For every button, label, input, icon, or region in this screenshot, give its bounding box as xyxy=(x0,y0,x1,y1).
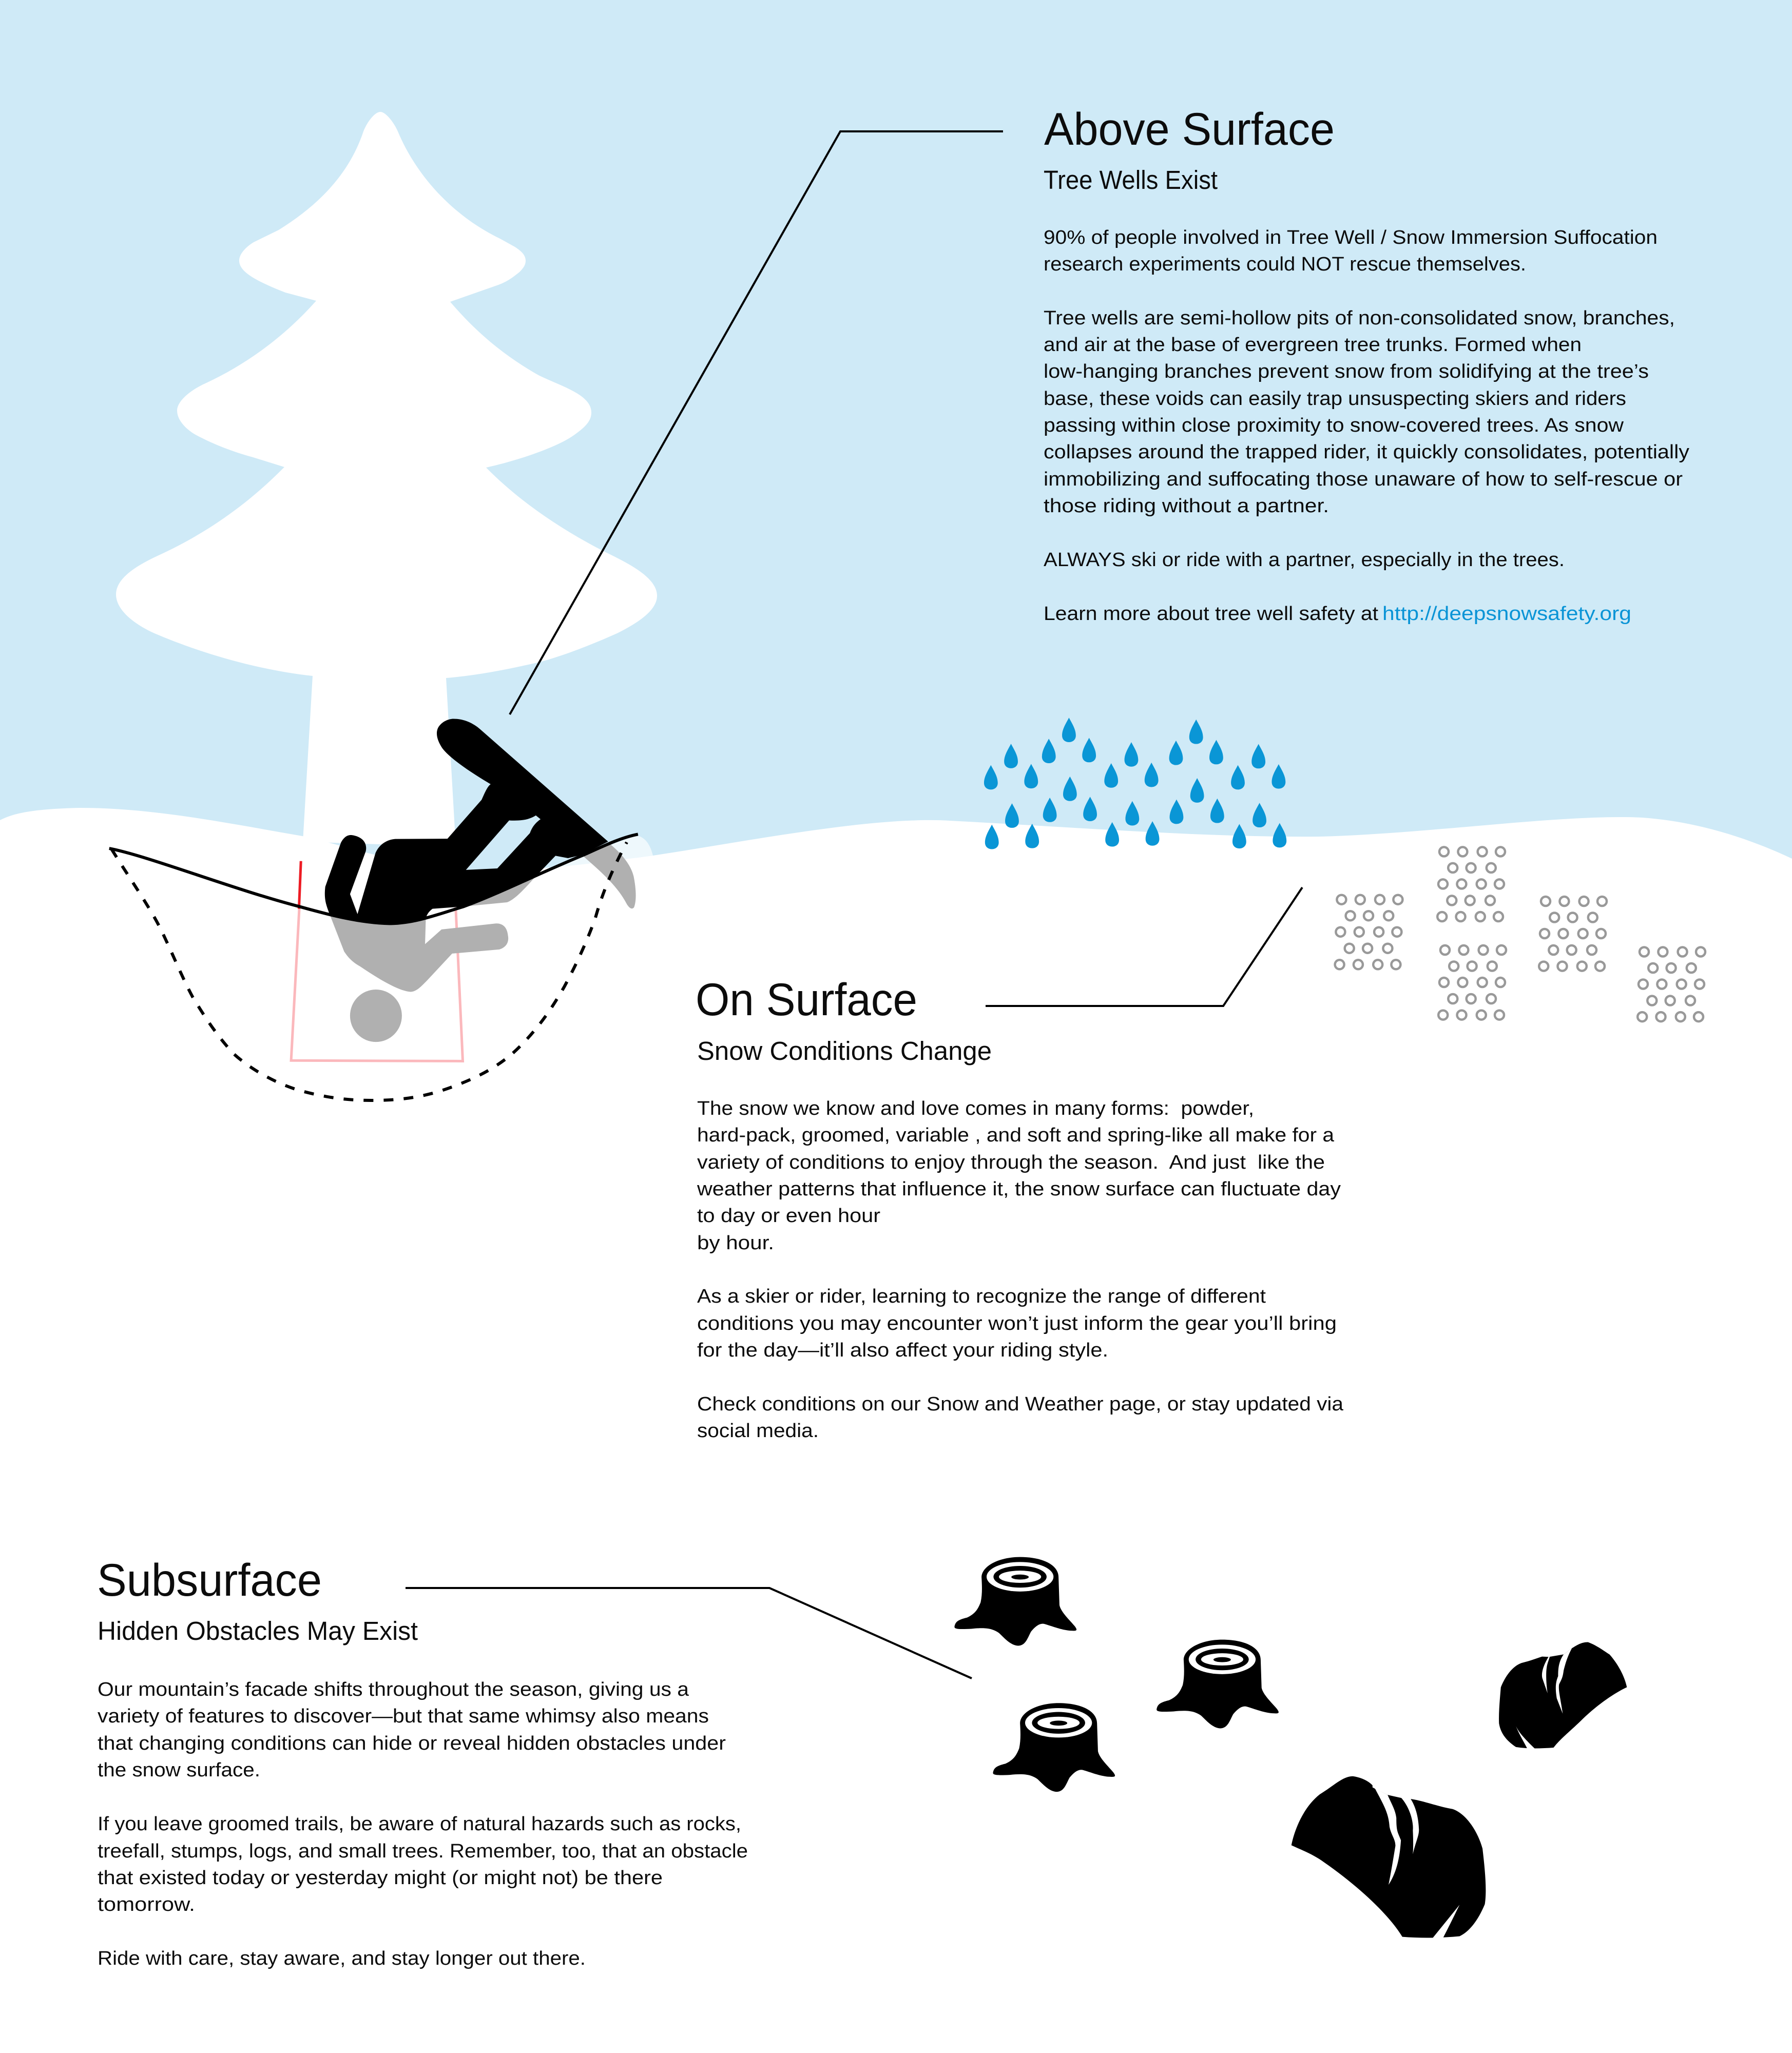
icon: water drops xyxy=(984,718,1286,849)
snow surface curve xyxy=(109,834,638,923)
body text: on surface: As a skier or rider, learning to recognize the range of different xyxy=(697,1286,1266,1307)
body text: on surface: The snow we know and love comes in many forms: powder, xyxy=(697,1098,1254,1119)
leader line: subsurface xyxy=(406,1588,972,1678)
body text: subsurface: If you leave groomed trails, be aware of natural hazards such as rocks, xyxy=(98,1813,741,1835)
person depth box xyxy=(291,861,463,1061)
body text: on surface: Check conditions on our Snow and Weather page, or stay updated via xyxy=(697,1393,1344,1415)
panel: subsurface text xyxy=(97,1554,748,1969)
buried rider figure xyxy=(109,719,638,1061)
body text: subsurface: treefall, stumps, logs, and small trees. Remember, too, that an obstacle xyxy=(98,1841,748,1862)
icon: snow clusters xyxy=(1335,847,1705,1021)
heading: subsurface: Subsurface xyxy=(97,1554,322,1605)
heading: on surface: On Surface xyxy=(696,974,917,1025)
body text: above surface: research experiments could NOT rescue themselves. xyxy=(1044,254,1526,275)
body text: on surface xyxy=(697,1098,1344,1442)
tree well snow haze xyxy=(536,835,653,874)
body text: above surface: http://deepsnowsafety.org xyxy=(1382,603,1631,625)
body text: subsurface: the snow surface. xyxy=(98,1759,260,1781)
icon: stump 3 xyxy=(993,1703,1115,1792)
body text: on surface: conditions you may encounter won’t just inform the gear you’ll bring xyxy=(697,1313,1337,1334)
body text: above surface: Tree wells are semi-hollow pits of non-consolidated snow, branches, xyxy=(1044,307,1675,329)
body text: above surface: collapses around the trapped rider, it quickly consolidates, potentially xyxy=(1044,441,1689,463)
icon: large rock xyxy=(1292,1776,1486,1939)
body text: above surface: Learn more about tree well safety at xyxy=(1044,603,1378,625)
subheading: snow conditions change: Snow Conditions Change xyxy=(697,1036,992,1066)
subheading: hidden obstacles may exist: Hidden Obstacles May Exist xyxy=(98,1616,418,1645)
body text: subsurface: Ride with care, stay aware, and stay longer out there. xyxy=(98,1948,586,1969)
body text: subsurface: Our mountain’s facade shifts throughout the season, giving us a xyxy=(98,1679,689,1700)
buried rider gray xyxy=(331,843,636,1042)
leader line: on surface xyxy=(986,887,1302,1006)
body text: on surface: for the day—it’ll also affect your riding style. xyxy=(697,1340,1108,1361)
rider and snowboard black xyxy=(325,719,608,924)
body text: above surface xyxy=(1044,227,1689,625)
body text: on surface: variety of conditions to enjoy through the season. And just like the xyxy=(697,1152,1325,1173)
body text: on surface: by hour. xyxy=(697,1232,774,1254)
heading: above surface: Above Surface xyxy=(1044,103,1335,154)
snow ground xyxy=(0,808,1792,2053)
icon: stump 2 xyxy=(1157,1640,1279,1729)
body text: above surface: base, these voids can easily trap unsuspecting skiers and riders xyxy=(1044,388,1626,410)
leader line: above surface xyxy=(510,131,1003,714)
body text: above surface: 90% of people involved in Tree Well / Snow Immersion Suffocation xyxy=(1044,227,1658,248)
body text: above surface: low-hanging branches prevent snow from solidifying at the tree’s xyxy=(1044,361,1649,382)
body text: subsurface: tomorrow. xyxy=(98,1894,195,1915)
body text: subsurface: variety of features to discover—but that same whimsy also means xyxy=(98,1706,709,1727)
panel: on surface text xyxy=(696,974,1344,1442)
tree xyxy=(116,112,657,847)
body text: on surface: hard-pack, groomed, variable , and soft and spring-like all make for a xyxy=(697,1125,1335,1146)
body text: subsurface xyxy=(98,1679,748,1969)
panel: above surface text xyxy=(1044,103,1689,625)
icon: small rock xyxy=(1499,1642,1627,1749)
body text: above surface: passing within close proximity to snow-covered trees. As snow xyxy=(1044,415,1624,436)
body text: above surface: ALWAYS ski or ride with a partner, especially in the trees. xyxy=(1044,549,1565,571)
body text: above surface: and air at the base of evergreen tree trunks. Formed when xyxy=(1044,334,1582,356)
body text: on surface: social media. xyxy=(697,1420,819,1442)
icon: stump 1 xyxy=(954,1557,1076,1646)
tree well diagram xyxy=(109,719,638,1100)
body text: on surface: weather patterns that influence it, the snow surface can fluctuate day xyxy=(697,1178,1341,1200)
tree well outline dashed xyxy=(111,842,627,1100)
body text: subsurface: that existed today or yesterday might (or might not) be there xyxy=(98,1867,663,1889)
subheading: tree wells exist: Tree Wells Exist xyxy=(1044,165,1218,195)
icon: stumps and rocks xyxy=(954,1557,1627,1939)
body text: on surface: to day or even hour xyxy=(697,1205,880,1227)
body text: above surface: those riding without a partner. xyxy=(1044,495,1329,517)
body text: subsurface: that changing conditions can hide or reveal hidden obstacles under xyxy=(98,1733,726,1754)
body text: above surface: immobilizing and suffocating those unaware of how to self-rescue or xyxy=(1044,469,1683,490)
